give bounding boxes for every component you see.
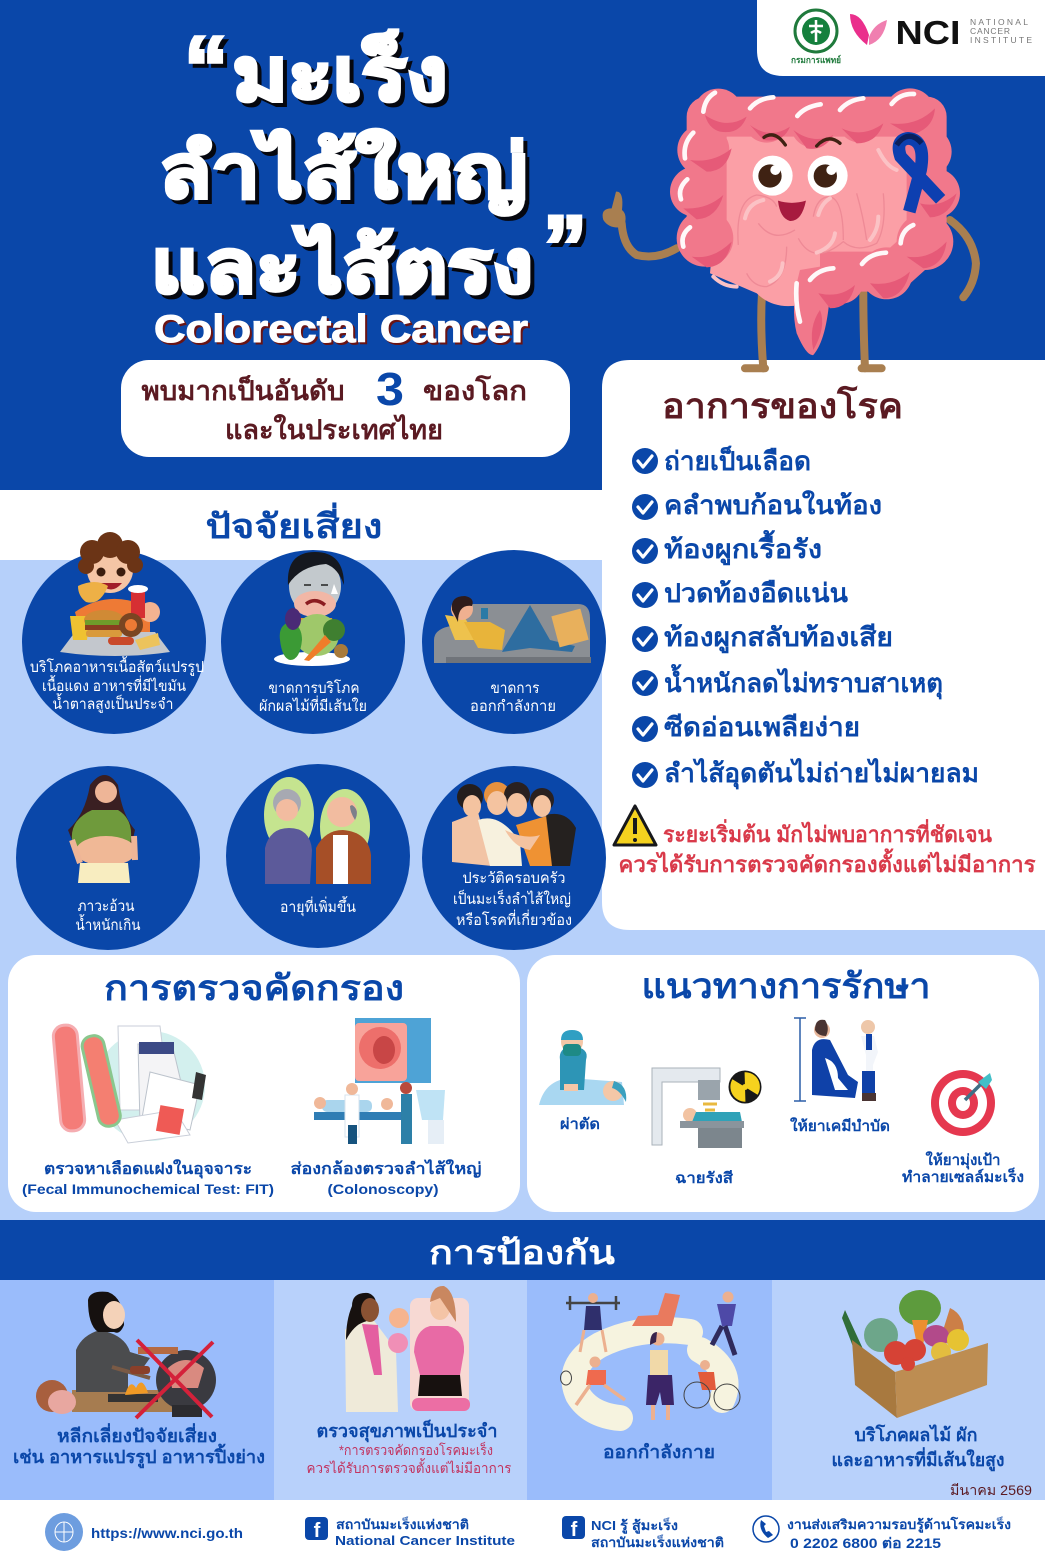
icon: overweight woman [68,775,136,883]
caption: regular check-up [306,1419,512,1476]
panel: screening [8,955,520,1212]
callout: ranking pill: ของโลก [423,374,527,406]
symptom checklist: คลำพบก้อนในท้อง [664,490,882,520]
icon: radiotherapy [652,1068,764,1148]
national cancer institute wordmark [970,17,1032,45]
panel: risk factor heading strip [0,490,602,560]
caption: FIT: ตรวจหาเลือดแฝงในอุจจาระ [44,1159,252,1179]
national cancer institute wordmark: CANCER [970,26,1010,36]
risk 6: family history: เป็นมะเร็งลำไส้ใหญ่ [453,889,571,908]
footer: facebook page 2 [591,1516,724,1550]
callout: ranking pill: 3 [376,363,404,415]
symptom checklist: ปวดท้องอืดแน่น [664,578,848,608]
icon: NCI butterfly [850,14,887,45]
panel: prevention [0,1280,1045,1500]
icon: family group [452,782,576,866]
caption: colonoscopy: ส่องกล้องตรวจลำไส้ใหญ่ [290,1159,482,1179]
caption: FIT [22,1159,274,1197]
caption: fruits and fibre [832,1424,1004,1472]
title line 3: และไส้ตรง [151,223,533,308]
logo panel [757,0,1045,76]
title line 1: มะเร็ง [232,31,448,116]
footer: facebook page 2: สถาบันมะเร็งแห่งชาติ [591,1533,724,1550]
risk 2: low fibre [221,550,405,734]
caption: exercise: ออกกำลังกาย [603,1442,715,1462]
closing quote: ” [543,197,587,296]
heading: risk factors: ปัจจัยเสี่ยง [206,502,382,546]
icon: doctor and patient on phone [345,1286,470,1412]
caption: FIT: (Fecal Immunochemical Test: FIT) [22,1181,274,1197]
caption: targeted therapy [902,1151,1024,1186]
icon: woman on sofa [434,596,591,663]
footer: contact: 0 2202 6800 ต่อ 2215 [790,1535,941,1551]
footer: contact [787,1515,1011,1551]
caption: colonoscopy: (Colonoscopy) [328,1181,438,1197]
risk 3: no exercise [422,550,606,734]
band: prevention heading [0,1220,1045,1280]
footer [0,1500,1045,1567]
symptom checklist: ท้องผูกสลับท้องเสีย [664,622,893,654]
heading: symptoms: อาการของโรค [662,385,903,426]
footer: website: https://www.nci.go.th [91,1525,243,1541]
risk 5: ageing: อายุที่เพิ่มขึ้น [280,896,356,917]
caption: regular check-up: *การตรวจคัดกรองโรคมะเร็ง [339,1441,493,1458]
icon: colon mascot [603,88,976,368]
panel: treatment [527,955,1039,1212]
national cancer institute wordmark: NATIONAL [970,17,1028,27]
icon: facebook 2 [562,1516,585,1541]
warning text [618,818,1036,877]
caption: radiotherapy: ฉายรังสี [675,1170,734,1187]
caption: chemotherapy: ให้ยาเคมีบำบัด [790,1117,890,1135]
icon: globe [45,1513,83,1551]
symptom checklist: ถ่ายเป็นเลือด [664,445,811,476]
icon: person grilling crossed out [36,1292,216,1418]
icon: kid eating [60,532,170,656]
English subtitle: Colorectal Cancer [154,308,528,351]
caption: targeted therapy: ให้ยามุ่งเป้า [926,1151,1000,1170]
national cancer institute wordmark: INSTITUTE [970,35,1032,45]
footer: facebook page 2: NCI รู้ สู้มะเร็ง [591,1516,678,1534]
symptoms content [614,385,1036,877]
icon: chemotherapy [794,1018,878,1101]
risk 6: family history: หรือโรคที่เกี่ยวข้อง [456,909,572,929]
caption: avoid risk factors: หลีกเลี่ยงปัจจัยเสี่ยง [57,1423,217,1446]
risk 3: no exercise: ขาดการ [490,680,540,697]
risk 6: family history [422,766,606,950]
caption: colonoscopy [290,1159,482,1197]
symptom checklist [632,445,979,790]
symptom checklist: น้ำหนักลดไม่ทราบสาเหตุ [664,663,943,700]
risk 3: no exercise: ออกกำลังกาย [470,698,556,715]
icon: target [931,1070,995,1136]
icon: medical department seal [795,10,837,52]
warning text: ระยะเริ่มต้น มักไม่พบอาการที่ชัดเจน [663,818,992,847]
footer: facebook page 1 [335,1515,515,1548]
risk 6: family history: ประวัติครอบครัว [462,870,566,887]
icon: elderly couple [264,777,371,884]
icon: sad boy with vegetables [274,552,350,666]
caption: avoid risk factors [13,1423,265,1469]
panel: risk factor circles [16,532,606,950]
panel: symptoms [602,360,1045,930]
NCI wordmark: NCI [896,14,960,51]
logo seal caption: กรมการแพทย์ [791,54,841,65]
title line 2: ลำไส้ใหญ่ [159,128,527,215]
caption: fruits and fibre: และอาหารที่มีเส้นใยสูง [832,1447,1004,1472]
caption: surgery: ผ่าตัด [560,1116,600,1133]
callout: ranking pill: และในประเทศไทย [225,414,443,445]
header panel [0,0,1045,490]
title [151,18,587,351]
icon: warning triangle [614,806,656,845]
symptom checklist: ท้องผูกเรื้อรัง [664,529,822,566]
risk 1: processed food [22,532,206,734]
icon: colonoscopy [314,1018,445,1144]
risk 2: low fibre: ขาดการบริโภค [268,679,360,697]
risk 1: processed food: น้ำตาลสูงเป็นประจำ [52,693,174,713]
risk 1: processed food: บริโภคอาหารเนื้อสัตว์แปรรูป [30,656,204,676]
callout: ranking pill: พบมากเป็นอันดับ [142,373,344,406]
caption: avoid risk factors: เช่น อาหารแปรรูป อาหารปิ้งย่าง [13,1443,265,1469]
caption: regular check-up: ตรวจสุขภาพเป็นประจำ [316,1419,498,1443]
icon: facebook 1: f [314,1520,321,1542]
caption: targeted therapy: ทำลายเซลล์มะเร็ง [902,1167,1024,1186]
icon: phone [753,1516,779,1542]
icon: FIT test kit [52,1024,206,1143]
icon: facebook 2: f [571,1519,578,1541]
icon: exercise activities [560,1292,740,1420]
symptom checklist: ลำไส้อุดตันไม่ถ่ายไม่ผายลม [664,757,979,790]
footer: facebook page 1: สถาบันมะเร็งแห่งชาติ [336,1515,469,1532]
icon: surgery [539,1030,626,1105]
icon: facebook 1 [305,1517,328,1542]
risk 4: obesity [16,766,200,950]
opening quote: “ [184,18,228,117]
caption: fruits and fibre: บริโภคผลไม้ ผัก [854,1424,978,1445]
icon: vegetable box [842,1290,988,1418]
heading: treatment: แนวทางการรักษา [642,967,930,1006]
date: มีนาคม 2569 [950,1482,1032,1498]
footer: contact: งานส่งเสริมความรอบรู้ด้านโรคมะเร็ง [787,1515,1011,1533]
footer: facebook page 1: National Cancer Institute [335,1533,515,1548]
risk 5: ageing [226,764,410,948]
caption: regular check-up: ควรได้รับการตรวจตั้งแต่ไม่มีอาการ [306,1458,512,1476]
symptom checklist: ซีดอ่อนเพลียง่าย [664,712,860,742]
risk 2: low fibre: ผักผลไม้ที่มีเส้นใย [259,695,367,715]
heading: screening: การตรวจคัดกรอง [104,969,404,1008]
risk 4: obesity: ภาวะอ้วน [78,898,134,915]
warning text: ควรได้รับการตรวจคัดกรองตั้งแต่ไม่มีอาการ [618,848,1036,877]
risk 1: processed food: เนื้อแดง อาหารที่มีไขมัน [42,675,186,695]
band: prevention heading: การป้องกัน [429,1234,616,1271]
risk 4: obesity: น้ำหนักเกิน [76,914,140,934]
callout: ranking pill [121,360,570,457]
